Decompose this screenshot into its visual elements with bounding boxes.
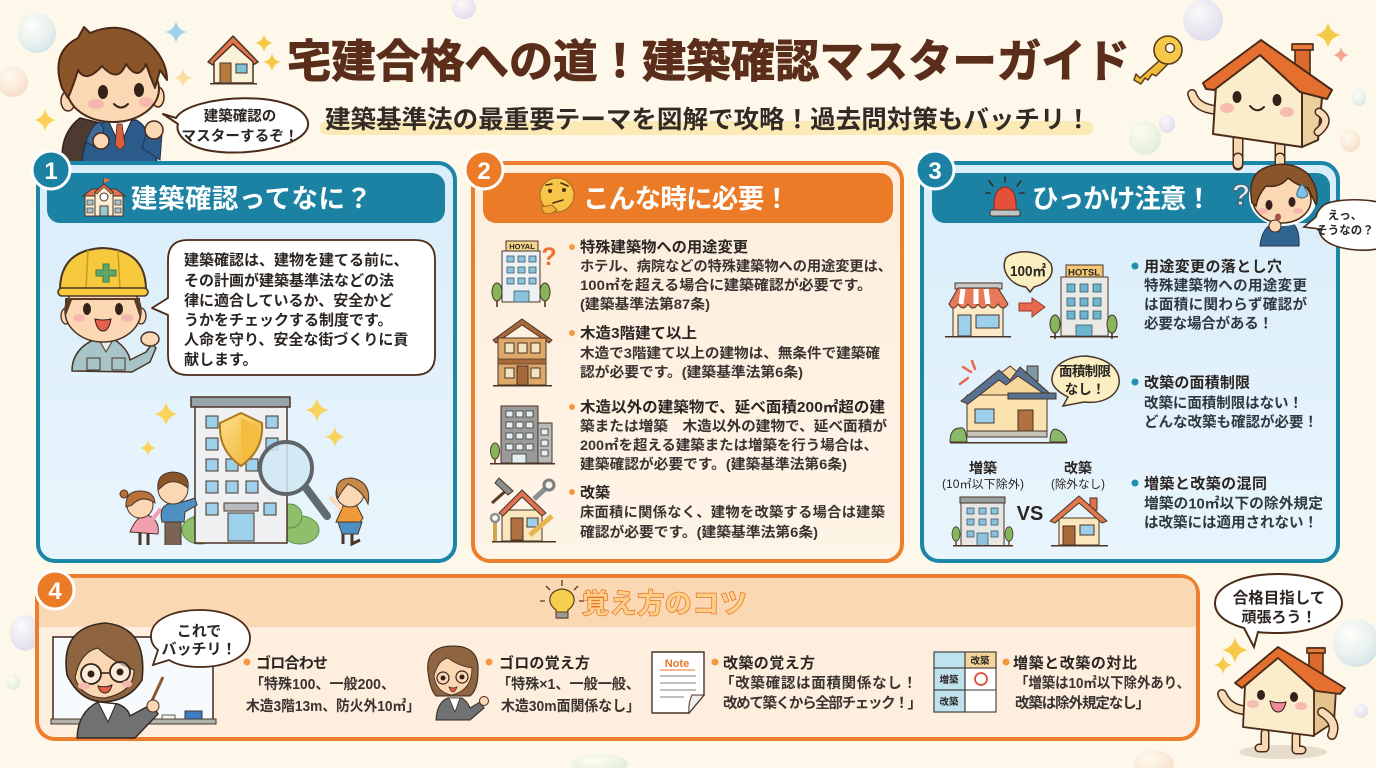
item 2: wooden three-storey: 木造3階建て以上: [580, 325, 697, 342]
panel 4 heading: [540, 580, 747, 619]
tip 4: [1002, 654, 1190, 712]
character: teacher at whiteboard: [51, 623, 216, 738]
tip 2: 木造30m面関係なし」: [501, 698, 640, 715]
speech bubble: mascot: 合格目指して: [1233, 588, 1325, 607]
item 1: use change pitfall: は面積に関わらず確認が: [1144, 296, 1308, 314]
tip 1: [244, 654, 420, 715]
panel 3 header: [932, 173, 1330, 223]
icon: note: Note: [665, 658, 689, 670]
speech bubble: student: マスターするぞ！: [182, 128, 298, 145]
item 3: non-wood over 200 sqm: 木造以外の建築物で、延べ面積200㎡超の建: [580, 398, 885, 416]
item 2: wooden three-storey: [493, 319, 880, 386]
item 1: special building: 特殊建築物への用途変更: [580, 238, 748, 256]
item 2: no area limit: [950, 356, 1318, 444]
panel number badges: 3: [928, 158, 942, 185]
item 4: renovation: [491, 478, 885, 542]
comparison table: [934, 652, 996, 712]
icon: thinking face: [540, 178, 574, 214]
tip 3: [712, 654, 922, 712]
comparison table: 改築: [970, 655, 990, 667]
tip 2: 「特殊×1、一般一般、: [497, 675, 640, 693]
tip 1: 木造3階13m、防火外10㎡」: [246, 697, 420, 715]
item 4: renovation: 床面積に関係なく、建物を改築する場合は建築: [580, 504, 885, 521]
item 3: extension vs renovation: (除外なし): [1051, 477, 1105, 491]
item 1: special building: HOYAL: [509, 242, 535, 251]
illustration: safe building with shield and family: [120, 397, 369, 545]
speech bubble: teacher: [151, 610, 250, 667]
item 1: use change pitfall: 用途変更の落とし穴: [1144, 258, 1282, 276]
item 2: no area limit: 改築に面積制限はない！: [1144, 394, 1303, 412]
panel 4: memory tips: [37, 576, 1198, 739]
speech bubble: explanation: 建築確認は、建物を建てる前に、: [184, 251, 409, 269]
tip 3: 改めて築くから全部チェック！」: [723, 694, 922, 712]
panel number badges: [32, 151, 954, 609]
item 4: renovation: 確認が必要です。(建築基準法第6条): [580, 524, 818, 541]
tip 3: 「改築確認は面積関係なし！: [720, 674, 917, 692]
item 1: special building: ホテル、病院などの特殊建築物への用途変更は、: [580, 258, 892, 275]
speech bubble: really?: そうなの？: [1316, 224, 1374, 237]
tip 4: 増築と改築の対比: [1013, 654, 1137, 672]
item 1: special building: 100㎡を超える場合に建築確認が必要です。: [580, 277, 872, 294]
panel 1: what is building confirmation: [38, 163, 455, 561]
item 1: special building: ?: [541, 243, 557, 271]
item 3: extension vs renovation: は改築には適用されない！: [1144, 514, 1318, 532]
item 2: wooden three-storey: 木造で3階建て以上の建物は、無条件で建築確: [580, 345, 880, 362]
character: inspector: [58, 248, 159, 372]
item 3: extension vs renovation: 増築の10㎡以下の除外規定: [1144, 494, 1323, 512]
panel 2 header: [483, 173, 893, 223]
panel 3 header: ひっかけ注意！: [1032, 184, 1212, 214]
item 2: no area limit: なし！: [1065, 382, 1105, 397]
item 3: extension vs renovation: VS: [1017, 503, 1043, 525]
panel number badges: 2: [477, 158, 491, 185]
panel 1 header: [47, 173, 445, 223]
character: student boy: [34, 21, 192, 168]
panel 4 heading: 覚え方のコツ: [582, 589, 747, 619]
item 1: use change pitfall: HOTSL: [1068, 268, 1100, 278]
item 3: non-wood over 200 sqm: 200㎡を超える建築または増築を行う場合は、: [580, 437, 878, 454]
item 3: extension vs renovation: [942, 460, 1323, 546]
item 4: renovation: 改築: [580, 484, 610, 502]
character: confused boy: ?: [1232, 179, 1250, 212]
item 1: use change pitfall: 特殊建築物への用途変更: [1144, 276, 1308, 294]
item 1: special building: (建築基準法第87条): [580, 296, 710, 313]
comparison table: 改築: [939, 696, 959, 708]
item 2: no area limit: 面積制限: [1059, 363, 1112, 379]
tip 4: 改築は除外規定なし」: [1015, 694, 1150, 712]
item 3: non-wood over 200 sqm: 建築確認が必要です。(建築基準法第6条): [580, 456, 847, 473]
speech bubble: explanation: [152, 240, 435, 375]
icon: key: [1134, 36, 1182, 84]
icon: school: [83, 178, 125, 216]
speech bubble: really?: [1304, 200, 1376, 250]
panel 3: trick warnings: [922, 163, 1338, 561]
character: house mascot feet over panel: [1238, 158, 1280, 165]
icon: title sparkles: [255, 34, 281, 71]
tip 1: 「特殊100、一般200、: [250, 675, 395, 693]
panel number badges: 4: [48, 578, 62, 605]
icon: note: [652, 652, 704, 713]
speech bubble: teacher: バッチリ！: [161, 641, 237, 658]
item 1: use change pitfall: 100㎡: [1010, 262, 1046, 280]
speech bubble: explanation: その計画が建築基準法などの法: [184, 272, 394, 290]
speech bubble: mascot: 頑張ろう！: [1241, 609, 1317, 626]
subtitle: 建築基準法の最重要テーマを図解で攻略！過去問対策もバッチリ！: [325, 106, 1091, 134]
icon: title house: [208, 36, 258, 84]
speech bubble: explanation: うかをチェックする制度です。: [184, 311, 393, 329]
title: 宅建合格への道！建築確認マスターガイド: [287, 36, 1130, 87]
item 2: wooden three-storey: 認が必要です。(建築基準法第6条): [580, 364, 803, 381]
tip 2: [486, 654, 640, 715]
item 3: non-wood over 200 sqm: 築または増築 木造以外の建物で、延べ面積が: [580, 418, 887, 435]
item 3: extension vs renovation: 増築と改築の混同: [1144, 474, 1267, 492]
item 3: extension vs renovation: (10㎡以下除外): [942, 477, 1024, 491]
item 3: extension vs renovation: 増築: [969, 460, 997, 476]
speech bubble: explanation: 献します。: [184, 352, 258, 368]
panel 2: when required: [473, 163, 902, 561]
item 2: no area limit: どんな改築も確認が必要！: [1144, 413, 1318, 431]
speech bubble: explanation: 律に適合しているか、安全かど: [184, 292, 393, 310]
tip 4: 「増築は10㎡以下除外あり、: [1015, 674, 1190, 692]
speech bubble: teacher: これで: [177, 623, 221, 640]
character: teacher small: [428, 646, 488, 720]
speech bubble: mascot: [1215, 574, 1342, 647]
character: house mascot bottom: [1214, 637, 1345, 759]
character: house mascot top: [1192, 22, 1349, 164]
panel 1 header: 建築確認ってなに？: [131, 184, 372, 214]
tip 1: ゴロ合わせ: [256, 654, 328, 672]
item 1: use change pitfall: 必要な場合がある！: [1144, 314, 1273, 332]
item 2: no area limit: 改築の面積制限: [1144, 374, 1250, 392]
item 3: non-wood over 200 sqm: [490, 398, 887, 473]
character: confused boy: [1232, 164, 1317, 246]
panel number badges: 1: [44, 158, 58, 185]
comparison table: 増築: [939, 674, 959, 686]
item 3: extension vs renovation: 改築: [1064, 460, 1092, 476]
speech bubble: really?: えっ、: [1328, 209, 1362, 222]
panel 2 header: こんな時に必要！: [583, 184, 790, 214]
item 1: special building: [492, 238, 892, 313]
speech bubble: explanation: 人命を守り、安全な街づくりに貢: [184, 330, 408, 348]
icon: alarm lamp: [986, 177, 1024, 216]
speech bubble: student: 建築確認の: [204, 107, 276, 125]
tip 2: ゴロの覚え方: [499, 654, 590, 672]
item 1: use change pitfall: [945, 252, 1308, 339]
tip 3: 改築の覚え方: [723, 654, 815, 672]
speech bubble: student: [163, 98, 308, 153]
